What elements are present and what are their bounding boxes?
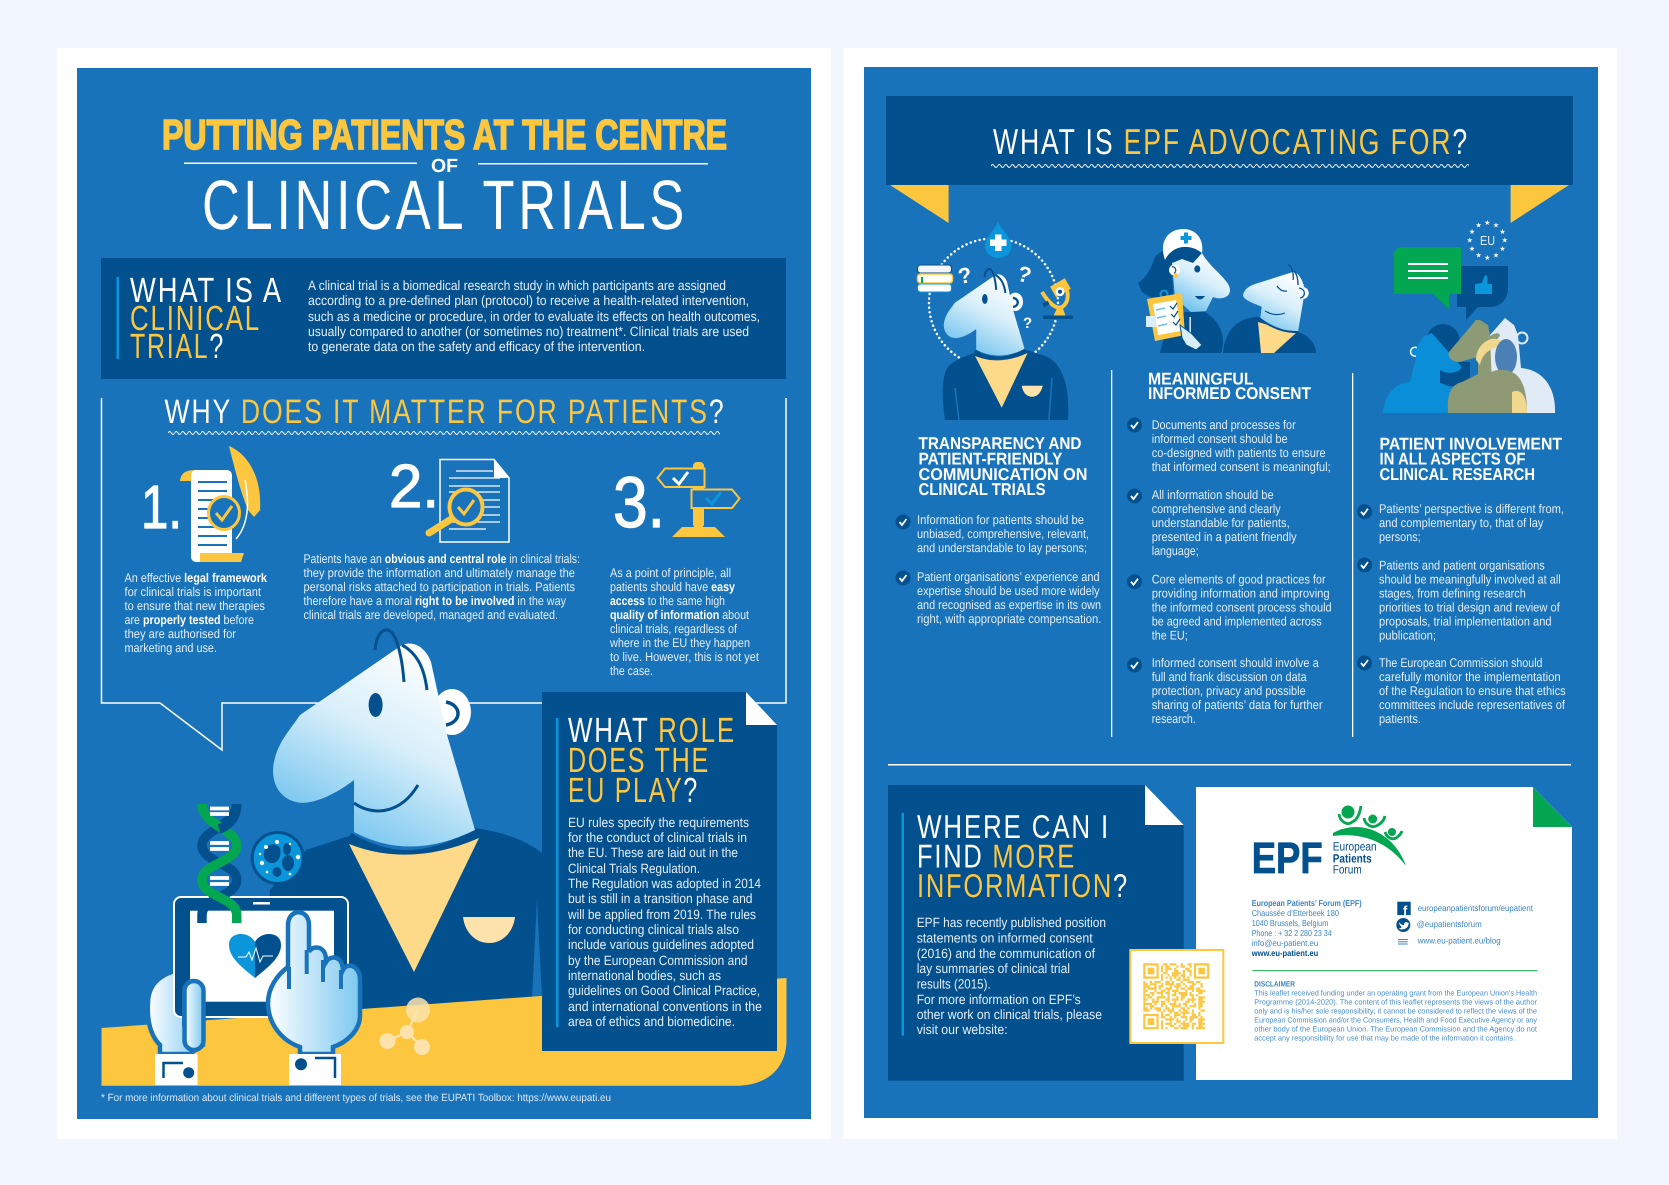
ear [433,689,471,735]
table [102,978,786,1086]
body [262,828,542,1040]
heading: INFORMATION? [917,867,1129,904]
text: EU rules: the EU. These are laid out in the [568,845,738,860]
text: Informed consent should involve a [1152,656,1319,670]
icon group: patients with speech bubbles [1383,219,1555,413]
title: PUTTING PATIENTS AT THE CENTRE [162,111,727,158]
panel: where can I find more information [888,785,1184,1081]
banner: what is EPF advocating for: WHAT IS EPF ADVOCATING FOR? [993,121,1469,162]
text: definition: such as a medicine or procedure, in order to evaluate its effects on health outcomes, [308,309,760,324]
text: definition [308,278,760,354]
heading: EU role: DOES THE [568,741,710,780]
banner: what is EPF advocating for [886,96,1573,223]
text: central role [304,552,580,622]
heading: CLINICAL RESEARCH [1380,465,1535,484]
pocket [463,917,515,943]
column: patient involvement [1357,434,1566,726]
speech bubble outline [102,398,786,750]
text: EU rules: by the European Commission and [568,953,748,968]
text: EU rules: guidelines on Good Clinical Practice, [568,983,760,998]
text: disclaimer: Programme (2014-2020). The content of this leaflet represents the views of the author [1254,998,1537,1007]
text: address: Chaussée d’Etterbeek 180 [1252,908,1339,918]
text: central role: Patients have an obvious and central role in clinical trials: [304,552,580,566]
text: persons; [1379,530,1421,544]
text: (2016) and the communication of [917,946,1095,961]
text: access to information: the case. [610,664,653,678]
heading: EU role [568,711,736,810]
icon: scroll and quill [180,446,262,562]
text: should be meaningfully involved at all [1379,572,1561,586]
text: proposals, trial implementation and [1379,614,1552,628]
text: and complementary to, that of lay [1379,516,1544,530]
icon: books [918,265,952,292]
text: For more information on EPF’s [917,992,1081,1007]
text: Information for patients should be [917,513,1084,527]
text: research. [1152,712,1196,726]
title: OF [431,156,458,177]
text: The European Commission should [1379,656,1542,670]
text: legal framework: marketing and use. [124,641,217,655]
icon: twitter [1396,918,1410,932]
text: central role: personal risks attached to participation in trials. Patients [304,580,575,594]
nurse face [1172,253,1230,312]
text: disclaimer: accept any responsibility for use that may be made of the information it contains. [1254,1033,1515,1042]
right page card [843,48,1617,1139]
text: priorities to trial design and review of [1379,600,1560,614]
patient body [1223,317,1316,353]
heading: what is a clinical trial: TRIAL? [130,327,225,366]
text: All information should be [1152,488,1274,502]
text: sharing of patients’ data for further [1152,698,1323,712]
icon: document and magnifier [429,460,509,542]
clipboard [1146,290,1202,350]
text: patients. [1379,712,1421,726]
icon: drop with cross [985,222,1012,258]
heading: CLINICAL TRIALS [918,480,1046,499]
check icons [1127,418,1142,672]
dark speech bubble [1457,266,1508,320]
title [162,111,727,244]
text: full and frank discussion on data [1152,670,1307,684]
text: access to information: clinical trials, regardless of [610,622,737,636]
number 1: 1. [141,473,182,541]
text: the informed consent process should [1152,600,1332,614]
text: address [1251,898,1362,958]
logo: EPF: Forum [1333,862,1362,876]
text: informed consent should be [1152,432,1288,446]
text: definition: to generate data on the safety and efficacy of the intervention. [308,339,645,354]
text: disclaimer: DISCLAIMER [1254,980,1295,989]
text: Patient organisations’ experience and [917,570,1100,584]
logo: EPF [1252,806,1406,883]
text: definition: A clinical trial is a biomedical research study in which participants are assigned [308,278,726,293]
column divider 1 [1111,370,1112,737]
text: right, with appropriate compensation. [917,612,1101,626]
panel: EPF contact sheet [1196,787,1572,1080]
heading [1380,434,1563,484]
text: EU rules: area of ethics and biomedicine. [568,1014,735,1029]
icon: cell [252,832,303,884]
text: EU rules: Clinical Trials Regulation. [568,861,700,876]
molecule [380,998,430,1055]
text: presented in a patient friendly [1152,530,1297,544]
heading: FIND MORE [917,838,1076,875]
white patient [1478,318,1555,413]
heading [918,434,1088,499]
text: other work on clinical trials, please [917,1007,1102,1022]
text: EU rules: The Regulation was adopted in 2014 [568,876,761,891]
text: visit our website: [917,1022,1008,1037]
text: legal framework: to ensure that new therapies [124,599,265,613]
text: publication; [1379,628,1436,642]
title: CLINICAL TRIALS [202,166,688,244]
heading: what is a clinical trial: WHAT IS A [130,271,283,310]
panel: what role does the EU play [542,692,777,1051]
text: EPF has recently published position [917,915,1106,930]
panel: right page [864,67,1598,1118]
scarf [975,353,1028,408]
question marks: ? [1015,261,1034,288]
pocket [1022,386,1043,397]
left palm [148,971,203,1054]
heading: what is a clinical trial [130,271,283,366]
text: statements on informed consent [917,931,1093,946]
right hand [268,912,360,1085]
heading: what is a clinical trial: CLINICAL [130,299,261,338]
text: central role: they provide the information and ultimately manage the [304,566,575,580]
social links: www.eu-patient.eu/blog [1417,936,1501,946]
text: central role: therefore have a moral right to be involved in the way [304,594,567,608]
text: legal framework: for clinical trials is important [124,585,261,599]
text: the EU; [1152,628,1188,642]
text: address: www.eu-patient.eu [1251,948,1318,958]
text: EU rules: and international conventions in the [568,999,762,1014]
text: access to information: where in the EU they happen [609,636,750,650]
text [1152,418,1332,726]
text: access to information: patients should have easy [610,580,735,594]
text: definition: according to a pre-defined plan (protocol) to receive a health-related intervention, [308,293,749,308]
text: legal framework [124,571,268,655]
text: disclaimer: only and is his/her sole responsibility; it cannot be considered to reflect the views of the [1254,1006,1537,1015]
body [943,350,1068,420]
text: access to information [609,566,759,678]
heading: INFORMED CONSENT [1148,384,1312,403]
logo: EPF: Patients [1333,852,1372,866]
text: EU rules [567,815,762,1029]
column: transparency and communication [896,434,1101,626]
EU stars: EU [1480,233,1495,248]
text: expertise should be used more widely [917,584,1100,598]
text: lay summaries of clinical trial [917,961,1070,976]
panel: what is a clinical trial [101,258,786,379]
icon: heart [229,934,281,978]
text: Patients’ perspective is different from, [1379,502,1564,516]
text: be agreed and implemented across [1152,614,1322,628]
logo: EPF: European [1333,840,1377,854]
check icons [896,514,910,586]
icon: microscope [1042,278,1073,319]
patient scarf [1258,322,1296,353]
text: language; [1152,544,1199,558]
heading: COMMUNICATION ON [918,465,1088,484]
text: legal framework: they are authorised for [124,627,236,641]
text: central role: clinical trials are developed, managed and evaluated. [304,608,558,622]
text: disclaimer: other body of the European Union. The European Commission and the Agency do not [1254,1024,1538,1033]
icon: DNA [202,804,237,923]
heading: why does it matter: WHY DOES IT MATTER FOR PATIENTS? [164,393,726,431]
text: protection, privacy and possible [1152,684,1306,698]
nurse cap [1163,229,1202,260]
column: meaningful informed consent [1127,369,1332,726]
EU stars: ★★★★★★★★★★★★ [1467,219,1508,262]
text: access to information: access to the same high [610,594,725,608]
text: understandable for patients, [1152,516,1290,530]
heading: PATIENT INVOLVEMENT [1380,434,1563,453]
text: stages, from defining research [1379,586,1526,600]
text: address: Phone : + 32 2 280 23 34 [1252,928,1332,938]
left page card [57,48,831,1139]
text: carefully monitor the implementation [1379,670,1561,684]
text: access to information: to live. However, this is not yet [610,650,759,664]
number 3: 3. [613,463,665,543]
logo: EPF: EPF [1252,834,1323,883]
text: legal framework: An effective legal framework [124,571,268,585]
text: access to information: quality of information about [610,608,749,622]
text: address: 1040 Brussels, Belgium [1252,918,1328,928]
text: and understandable to lay persons; [917,541,1087,555]
panel: left page [77,68,811,1119]
heading: WHERE CAN I [917,808,1110,845]
icon group: nurse and patient [1138,229,1316,353]
text: address: European Patients’ Forum (EPF) [1252,898,1362,908]
text: disclaimer: European Commission and/or the Consumers, Health and Food Executive Agency or any [1254,1015,1537,1024]
nurse hair [1138,247,1202,297]
heading: PATIENT-FRIENDLY [918,450,1063,469]
icon group: questioning patient [918,222,1073,420]
heading [1148,369,1312,403]
tablet [174,897,348,1017]
head [944,269,1025,358]
text: Patients and patient organisations [1379,558,1545,572]
heading: MEANINGFUL [1148,369,1254,388]
left thumb and cuff [155,981,204,1085]
text: disclaimer [1254,980,1538,1042]
text: EU rules: will be applied from 2019. The rules [567,907,756,922]
scarf [349,838,479,972]
QR code [1130,950,1223,1043]
text: definition: usually compared to another (or sometimes no) treatment*. Clinical trials are used [308,324,749,339]
text [917,513,1101,626]
text: access to information: As a point of principle, all [610,566,731,580]
heading: EU role: WHAT ROLE [568,711,736,750]
question marks: ? [1023,315,1032,332]
column divider 2 [1352,373,1353,737]
icon: blog [1398,940,1408,944]
question marks: ? [956,262,974,289]
text: Core elements of good practices for [1152,572,1326,586]
horizontal rule [888,764,1571,766]
text: EU rules: but is still in a transition phase and [568,891,752,906]
text: EU rules: international bodies, such as [568,968,721,983]
heading: TRANSPARENCY AND [918,434,1082,453]
blue patient [1383,324,1470,413]
text: unbiased, comprehensive, relevant, [917,527,1089,541]
text: and recognised as expertise in its own [917,598,1101,612]
green speech bubble [1394,247,1461,309]
head [273,644,475,847]
text: EU rules: for conducting clinical trials also [568,922,739,937]
text: address: info@eu-patient.eu [1252,938,1319,948]
heading [917,808,1129,904]
text: EU rules: for the conduct of clinical trials in [568,830,747,845]
text: legal framework: are properly tested before [124,613,254,627]
text: co-designed with patients to ensure [1152,446,1326,460]
text [917,915,1106,1037]
social links: europeanpatientsforum/eupatient [1418,903,1534,913]
text: results (2015). [917,977,991,992]
text: committees include representatives of [1379,698,1565,712]
text: disclaimer: This leaflet received funding under an operating grant from the European Union’s Health [1254,989,1537,998]
text: EU rules: EU rules specify the requirements [568,815,749,830]
heading: EU role: EU PLAY? [568,771,699,810]
nurse body [1160,312,1223,353]
illustration: patient with tablet [102,630,786,1086]
text: that informed consent is meaningful; [1152,460,1331,474]
text [1379,502,1566,726]
question marks [956,261,1034,332]
footnote: * For more information about clinical trials and different types of trials, see the EUPATI Toolbox: https://www.eupati.eu [101,1092,611,1104]
heading: IN ALL ASPECTS OF [1380,450,1526,469]
icon: facebook: f [1403,903,1408,918]
text: providing information and improving [1152,586,1330,600]
social links [1396,902,1534,946]
check icons [1357,504,1372,670]
text: of the Regulation to ensure that ethics [1379,684,1566,698]
olive patient [1448,320,1527,413]
social links: @eupatientsforum [1417,919,1482,929]
patient head [1243,265,1309,332]
text: EU rules: include various guidelines adopted [568,937,754,952]
number 2: 2. [389,452,439,520]
text: Documents and processes for [1152,418,1296,432]
text: comprehensive and clearly [1152,502,1281,516]
icon: signpost [658,462,740,537]
